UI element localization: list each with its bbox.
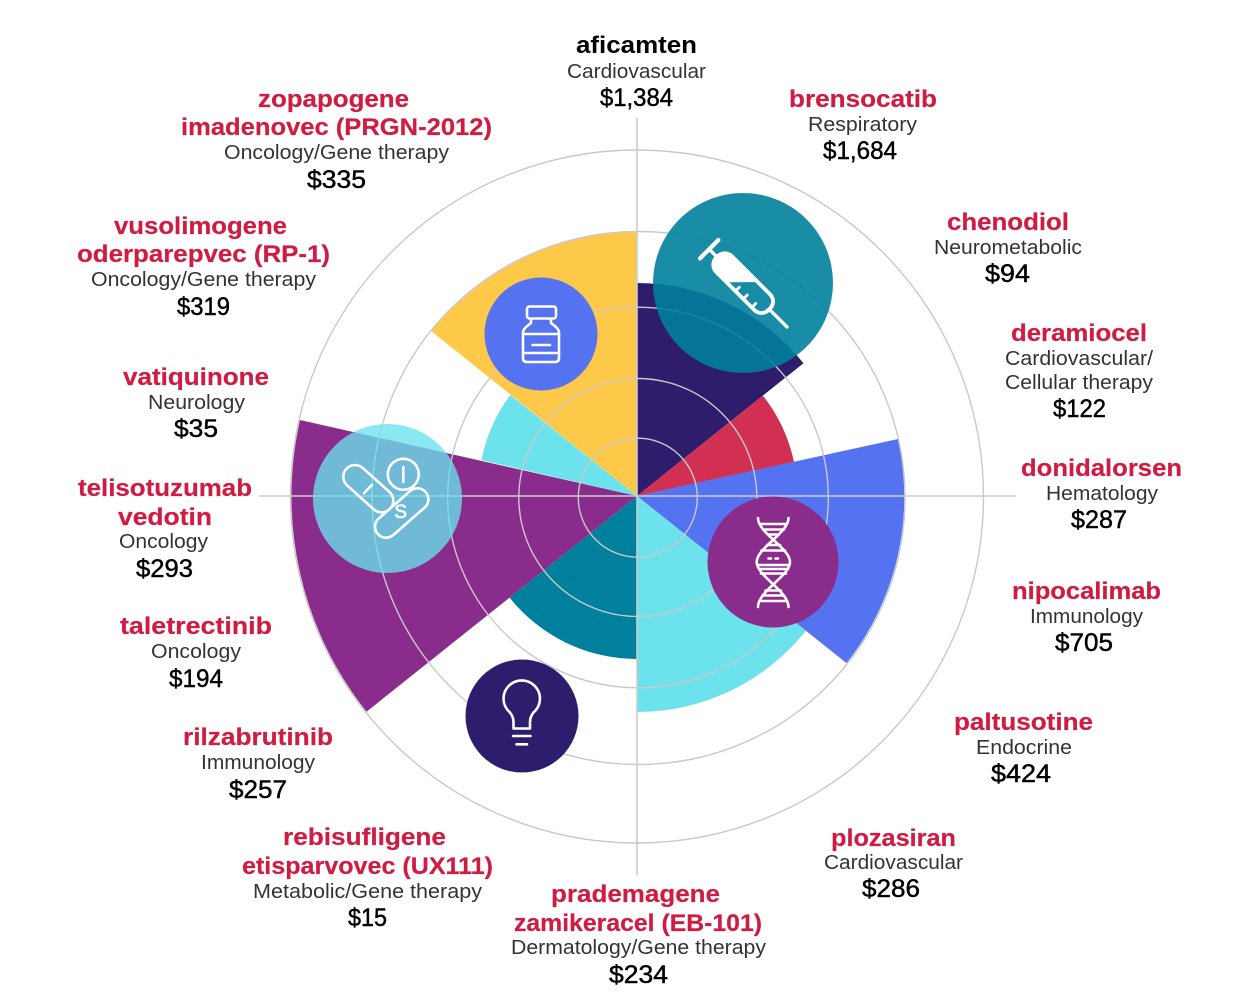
label: deramiocel [1005,320,1153,423]
wedge: telisotuzumab purple [291,420,637,712]
label: rilzabrutinib: $257 [229,776,287,804]
label: nipocalimab: nipocalimab [1012,578,1161,605]
label: vatiquinone: Neurology [148,392,245,414]
label: vusolimogene oderparepvec: $319 [177,293,230,321]
label: nipocalimab: $705 [1055,629,1113,657]
label: paltusotine: paltusotine [954,709,1093,736]
label: telisotuzumab vedotin: telisotuzumab [78,475,252,502]
label: plozasiran: plozasiran [831,825,956,852]
label: rilzabrutinib [183,724,333,804]
wedge: chenodiol red [637,396,794,496]
label: aficamten: Cardiovascular [567,61,706,83]
label: prademagene zamikeracel: zamikeracel (EB-101) [514,910,762,937]
label: donidalorsen: donidalorsen [1021,455,1182,482]
label: taletrectinib: Oncology [151,641,241,663]
label: deramiocel: Cellular therapy [1005,372,1153,394]
label: rilzabrutinib: rilzabrutinib [183,724,333,751]
label: deramiocel: $122 [1053,395,1106,423]
label: chenodiol: $94 [985,260,1030,288]
label: chenodiol: Neurometabolic [934,237,1082,259]
label: prademagene zamikeracel [511,881,766,989]
wedge: donidalorsen blue [637,439,904,663]
label: aficamten [567,32,706,112]
label: taletrectinib [120,613,272,693]
label: prademagene zamikeracel: $234 [609,961,668,989]
label: plozasiran: $286 [862,875,920,903]
label: taletrectinib: $194 [169,665,223,693]
label: deramiocel: Cardiovascular/ [1005,348,1153,370]
label: rebisufligene etisparvovec: Metabolic/Gene therapy [253,881,482,903]
label: telisotuzumab vedotin: Oncology [119,531,208,553]
label: brensocatib [789,86,937,165]
label: vusolimogene oderparepvec [77,213,330,321]
label: brensocatib: Respiratory [808,114,917,136]
label: vusolimogene oderparepvec: Oncology/Gene therapy [91,269,316,291]
label: nipocalimab: Immunology [1030,606,1143,628]
icon: DNA helix [708,496,838,628]
label: brensocatib: $1,684 [823,137,897,165]
wedge: rilzabrutinib teal [510,496,637,659]
icon: pills [313,424,462,573]
label: brensocatib: brensocatib [789,86,937,113]
label: rilzabrutinib: Immunology [201,752,315,774]
label: rebisufligene etisparvovec: etisparvovec (UX111) [242,853,493,880]
label: donidalorsen [1021,455,1182,534]
label: zopapogene imadenovec: $335 [307,166,366,194]
label: aficamten: aficamten [576,32,697,59]
label: paltusotine [954,709,1093,788]
icon: light bulb [466,660,578,772]
label: vatiquinone: $35 [174,415,218,443]
icon: pills: S [394,502,407,523]
wedge: aficamten navy [637,283,804,496]
label: rebisufligene etisparvovec: $15 [348,904,387,932]
label: prademagene zamikeracel: prademagene [551,881,720,908]
label: vusolimogene oderparepvec: oderparepvec (RP-1) [77,241,330,268]
wedge: vatiquinone cyan [482,395,637,496]
label: prademagene zamikeracel: Dermatology/Gene therapy [511,937,766,959]
label: chenodiol [934,209,1082,288]
label: zopapogene imadenovec: Oncology/Gene therapy [224,142,449,164]
label: vatiquinone [123,364,269,443]
label: telisotuzumab vedotin: $293 [136,555,193,583]
label: donidalorsen: $287 [1071,506,1127,534]
label: zopapogene imadenovec: zopapogene [258,86,409,113]
label: plozasiran: Cardiovascular [824,852,963,874]
label: vatiquinone: vatiquinone [123,364,269,391]
label: zopapogene imadenovec [181,86,492,194]
icon: syringe [653,193,833,373]
label: plozasiran [824,825,963,903]
label: rebisufligene etisparvovec: rebisufligene [283,824,446,851]
wedge: vusolimogene yellow [430,231,637,496]
label: nipocalimab [1012,578,1161,657]
wedge: paltusotine cyan [637,496,806,712]
label: zopapogene imadenovec: imadenovec (PRGN-2012) [181,114,492,141]
label: rebisufligene etisparvovec [242,824,493,932]
label: taletrectinib: taletrectinib [120,613,272,640]
label: donidalorsen: Hematology [1046,483,1158,505]
label: paltusotine: Endocrine [976,737,1072,759]
label: telisotuzumab vedotin: vedotin [118,504,212,531]
icon: vaccine vial [484,278,598,390]
label: paltusotine: $424 [991,760,1051,788]
label: deramiocel: deramiocel [1011,320,1147,347]
label: aficamten: $1,384 [600,84,673,112]
label: chenodiol: chenodiol [947,209,1069,236]
label: telisotuzumab vedotin [78,475,252,583]
label: vusolimogene oderparepvec: vusolimogene [114,213,287,240]
